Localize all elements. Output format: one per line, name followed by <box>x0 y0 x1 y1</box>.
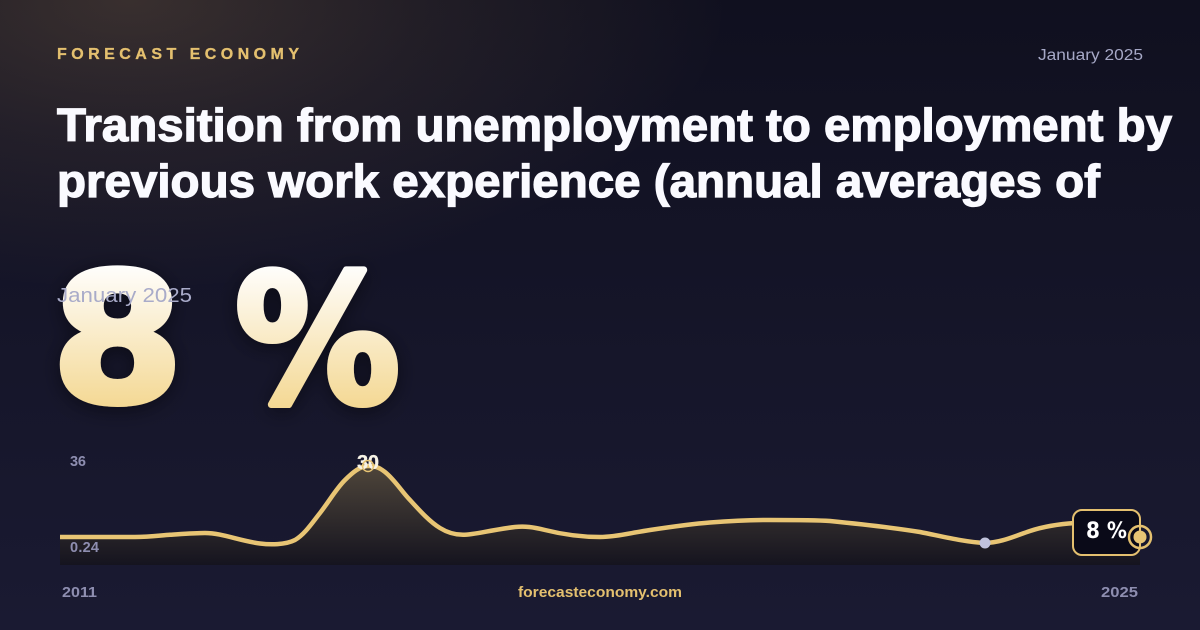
big value: 8 <box>52 236 183 443</box>
brand eyebrow: FORECAST ECONOMY <box>57 46 299 63</box>
title: previous work experience (annual averages of <box>57 155 1101 207</box>
y-axis min label: 0.24 <box>70 540 99 556</box>
chart area <box>60 466 1140 565</box>
current value callout: 8 % <box>1086 519 1127 544</box>
end year: 2025 <box>1101 585 1138 601</box>
y-axis max label: 36 <box>70 454 86 470</box>
big value <box>52 236 400 444</box>
date top right: January 2025 <box>1038 47 1143 64</box>
peak value label: 30 <box>357 452 379 474</box>
website: forecasteconomy.com <box>518 585 682 601</box>
chart line <box>60 466 1140 544</box>
title: Transition from unemployment to employment by <box>57 99 1172 151</box>
current value marker <box>1129 526 1151 548</box>
line chart <box>60 452 1151 565</box>
big value: % <box>235 237 400 444</box>
current value callout <box>1073 510 1140 555</box>
low point marker <box>980 538 990 548</box>
title <box>57 99 1172 207</box>
start year: 2011 <box>62 585 97 601</box>
peak marker <box>362 460 374 472</box>
overlapping date label: January 2025 <box>57 285 192 307</box>
